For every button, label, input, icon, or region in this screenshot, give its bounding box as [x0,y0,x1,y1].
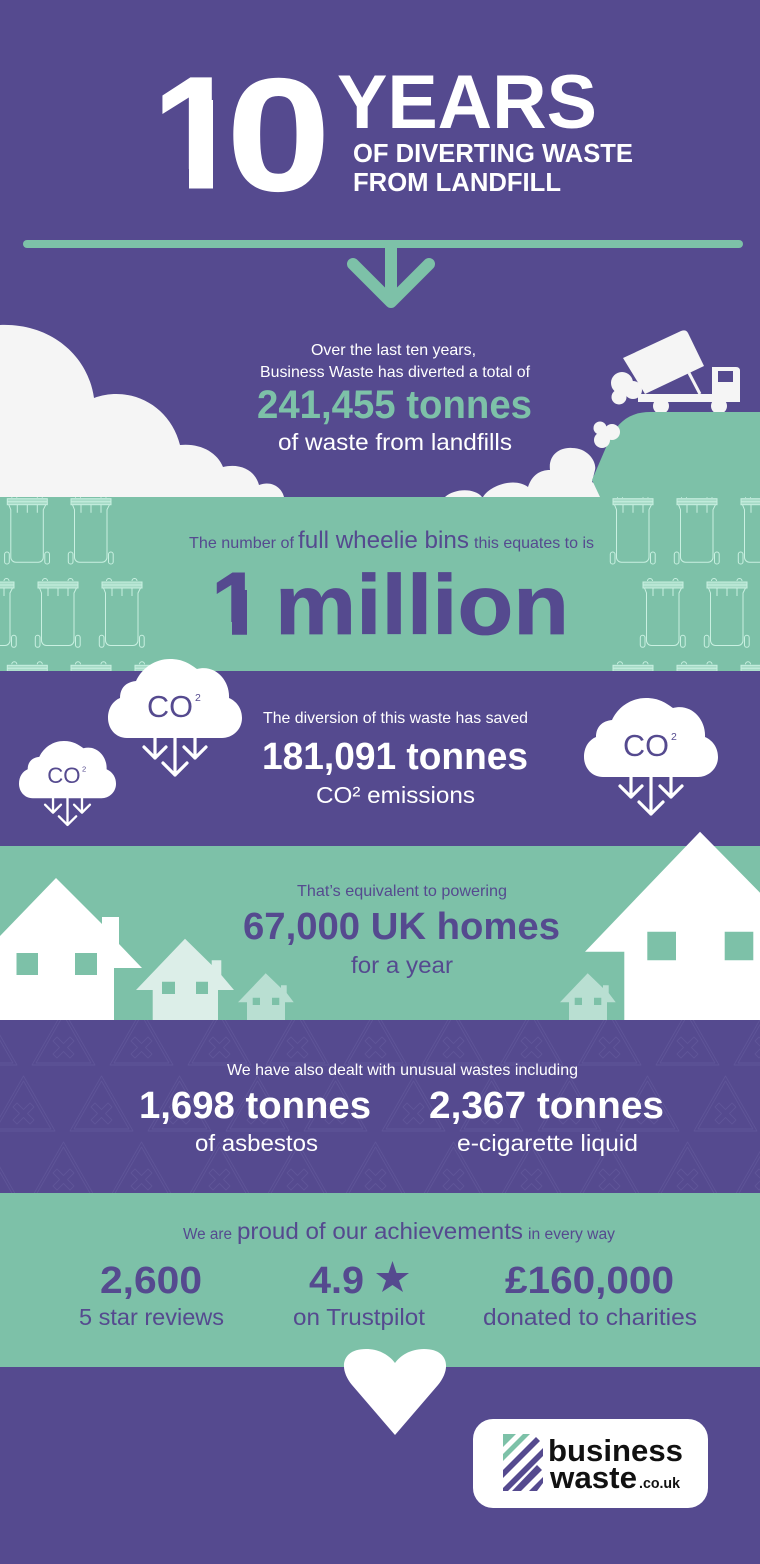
text: homes equivalent: for a year [351,952,453,978]
text: unusual wastes intro: We have also dealt with unusual wastes including [227,1062,578,1079]
icon: right CO2 cloud [584,698,718,814]
panel: homes [0,846,760,1020]
icon: large CO2 cloud: CO [147,689,193,724]
stat: reviews: 5 star reviews [79,1304,224,1330]
stat: reviews: 2,600 [100,1260,202,1302]
text: achievements heading [183,1218,615,1244]
logo wordmark: .co.uk [639,1475,681,1492]
illustration: left clouds [0,325,284,497]
logo: business waste [473,1419,708,1508]
hazard triangle pattern [0,1010,760,1197]
icon: large right house [585,832,760,1020]
stat: e-cigarette liquid: e-cigarette liquid [457,1130,638,1156]
text: bins intro [189,527,594,554]
text: bins intro: The number of [189,535,295,552]
text: homes equivalent: 67,000 UK homes [243,906,560,948]
text block: landfill diversion total: 241,455 tonnes [257,383,532,427]
stat: donations: £160,000 [505,1260,674,1302]
stat: asbestos: of asbestos [195,1130,318,1156]
icon: small house [238,973,294,1020]
text block: landfill diversion total: Business Waste has diverted a total of [260,364,531,381]
text: achievements heading: proud of our achievements [237,1218,523,1244]
title: YEARS [337,60,597,145]
icon: tipping truck [611,330,740,414]
icon: small CO2 cloud: 2 [82,764,86,773]
icon: small CO2 cloud [19,741,116,825]
text block: CO2 savings: CO² emissions [316,782,475,808]
stat: e-cigarette liquid: 2,367 tonnes [429,1085,664,1127]
title: 1 [152,43,241,222]
title: 0 [226,45,330,224]
stat: reviews [79,1260,224,1330]
text: homes equivalent [243,883,560,978]
text block: landfill diversion total: of waste from landfills [278,429,512,455]
stat: asbestos [139,1085,371,1156]
logo wordmark: business [548,1433,683,1468]
stat: trustpilot [293,1260,426,1330]
title: FROM LANDFILL [353,169,561,197]
icon: large CO2 cloud: 2 [195,692,201,704]
text block: landfill diversion total [257,342,532,455]
title: OF DIVERTING WASTE [353,140,633,168]
text block: CO2 savings: 181,091 tonnes [262,736,528,778]
icon: large CO2 cloud [108,659,242,775]
logo wordmark [548,1433,683,1495]
text: bins intro: full wheelie bins [298,527,469,554]
text block: landfill diversion total: Over the last ten years, [311,342,476,359]
logo mark [503,1434,543,1491]
panel: achievements [0,1193,760,1367]
stat: asbestos: 1,698 tonnes [139,1085,371,1127]
stat: donations: donated to charities [483,1304,697,1330]
text: achievements heading: We are [183,1226,232,1243]
icon: small right house [560,973,616,1020]
panel: unusual wastes [0,1010,760,1197]
stat: donations [483,1260,697,1330]
panel: wheelie bins [0,497,760,671]
icon: heart [344,1349,446,1435]
text: homes equivalent: That’s equivalent to powering [297,883,507,900]
icon: falling waste puff [594,422,620,448]
illustration: right clouds [445,448,602,497]
text: 1 million: 1 [212,554,260,653]
icon: right CO2 cloud: CO [623,728,669,763]
icon: right CO2 cloud: 2 [671,731,677,743]
stat: e-cigarette liquid [429,1085,664,1156]
text: achievements heading: in every way [528,1226,615,1243]
illustration: landfill hill [592,412,760,497]
logo wordmark: waste [549,1460,637,1495]
text: bins intro: this equates to is [474,535,594,552]
icon: medium house [136,939,234,1020]
stat: trustpilot: 4.9 [309,1260,364,1302]
arrow: divider and down arrow [27,244,739,302]
text: 1 million: million [275,558,569,652]
text block: CO2 savings [262,710,528,808]
icon: large left house [0,878,142,1020]
wheelie bin pattern [0,495,760,731]
stat: trustpilot: on Trustpilot [293,1304,426,1330]
icon: small CO2 cloud: CO [47,763,81,788]
text block: CO2 savings: The diversion of this waste has saved [263,710,528,727]
title [150,43,633,224]
